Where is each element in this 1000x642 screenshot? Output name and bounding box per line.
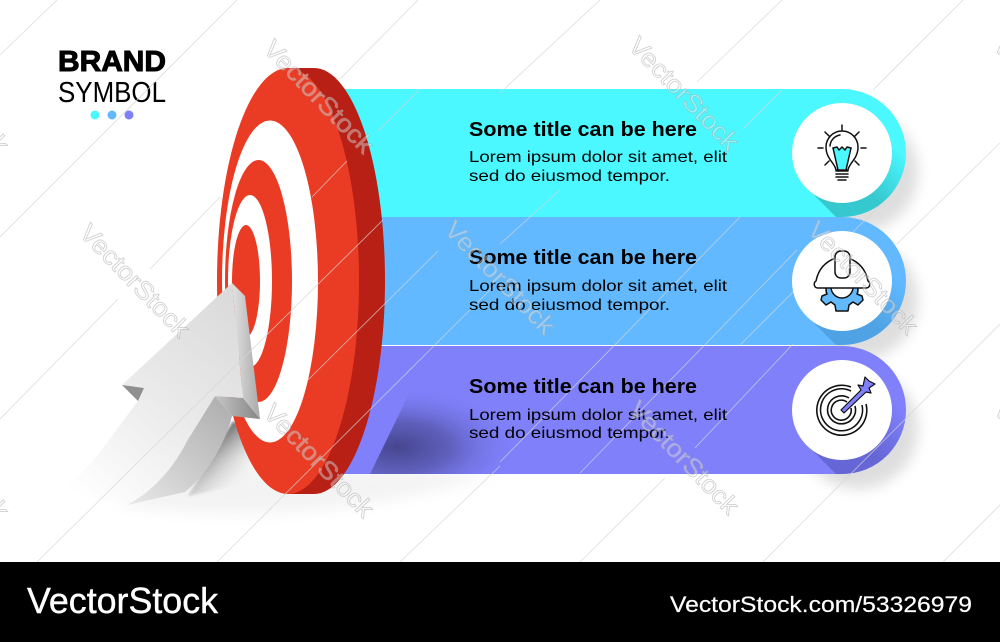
icon: light bulb: [792, 103, 892, 203]
band: cyan: [344, 89, 906, 217]
text block 2: Lorem ipsum dolor sit amet, elit: [469, 278, 728, 295]
floor shadow: [115, 465, 500, 514]
watermark text: VectorStock: [623, 396, 745, 521]
arrow hitting the target: [57, 283, 260, 505]
text block 1: sed do eiusmod tempor.: [469, 168, 670, 185]
brand logo: SYMBOL: [58, 77, 166, 109]
text block 1: Some title can be here: [469, 119, 697, 141]
text block 2: Some title can be here: [469, 247, 697, 269]
target shadow on purple band: [370, 380, 560, 474]
text block 3: [469, 376, 728, 442]
text block 2: sed do eiusmod tempor.: [469, 297, 670, 314]
brand logo: BRAND: [58, 46, 166, 78]
footer bar: VectorStock.com/53326979: [670, 592, 972, 617]
watermark text: VectorStock: [623, 32, 745, 157]
band: purple: [344, 346, 906, 474]
watermark text: VectorStock: [74, 219, 196, 344]
text block 1: Lorem ipsum dolor sit amet, elit: [469, 149, 728, 166]
footer bar: VectorStock: [27, 580, 219, 621]
outer shadows of the bands: [798, 112, 918, 489]
arrow shadow behind target: [188, 421, 262, 496]
watermark text: VectorStock: [802, 216, 924, 341]
watermark text: VectorStock: [258, 35, 380, 160]
watermark text: VectorStock: [439, 216, 561, 341]
text block 3: Some title can be here: [469, 376, 697, 398]
brand logo: [58, 46, 166, 120]
icon: target with dart: [792, 360, 892, 460]
text block 1: [469, 119, 728, 185]
target board: [217, 68, 385, 494]
text block 2: [469, 247, 728, 314]
watermark text: [0, 32, 1000, 526]
band: blue: [382, 217, 906, 345]
text block 3: Lorem ipsum dolor sit amet, elit: [469, 407, 728, 424]
footer bar: [0, 562, 1000, 642]
text block 3: sed do eiusmod tempor.: [469, 425, 670, 442]
icon: hard hat and gear: [792, 231, 892, 331]
watermark text: VectorStock: [258, 399, 380, 524]
